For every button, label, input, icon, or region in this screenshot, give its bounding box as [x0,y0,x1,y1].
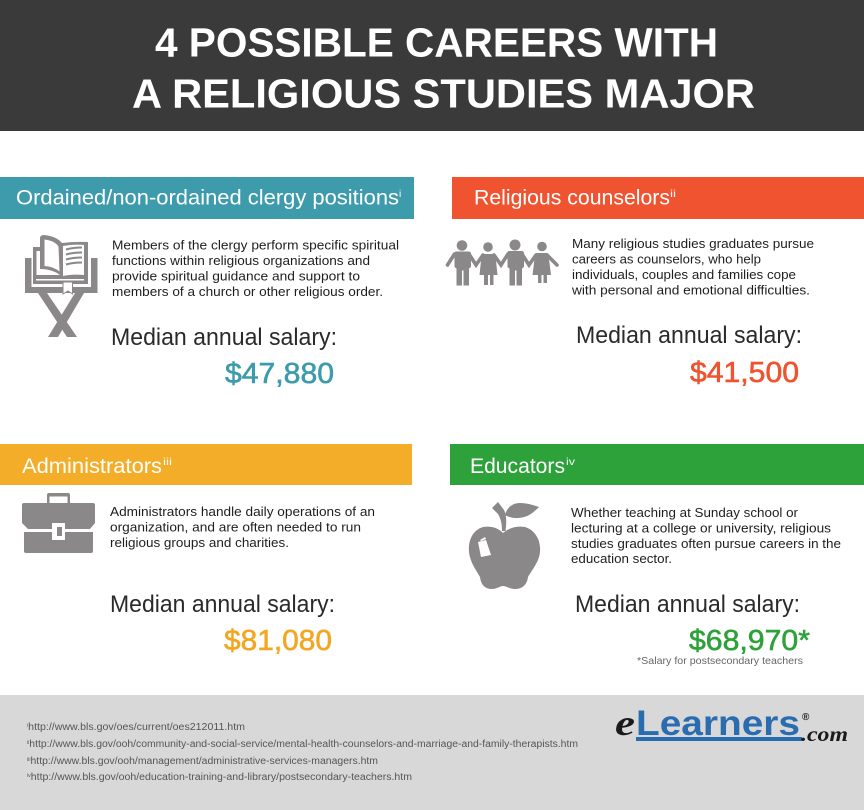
heading: counselors: ii [670,189,676,200]
description: administrators [110,504,375,550]
heading: educators: iv [566,457,575,468]
salary: counselors: Median annual salary: [576,322,802,349]
description: counselors [571,236,814,298]
description: educators: Whether teaching at Sunday school or [571,505,799,520]
source links: ii [27,740,29,746]
source links: iv [27,773,31,779]
description: clergy [112,238,399,299]
panel: counselors [448,177,864,389]
panel: administrators [0,444,412,657]
salary: clergy: Median annual salary: [111,324,337,351]
heading: clergy: Ordained/non-ordained clergy positions [16,186,399,210]
salary: administrators: $81,080 [224,625,332,657]
heading: educators: Educators [470,455,565,478]
heading: administrators: iii [163,457,172,468]
footer [0,695,864,810]
description: counselors: Many religious studies graduates pursue [572,236,814,251]
icon: apple [469,502,540,589]
heading: administrators: Administrators [22,455,162,478]
icon: people holding hands [448,240,557,286]
panel: educators [450,444,864,667]
description: counselors: individuals, couples and families cope [572,267,796,282]
description: educators [571,505,841,566]
salary: clergy [111,324,337,390]
source links: http://www.bls.gov/ooh/education-training-and-library/postsecondary-teachers.htm [31,772,412,783]
heading: educators [450,444,864,485]
salary: counselors: $41,500 [690,357,799,389]
description: clergy: members of a church or other religious order. [112,284,383,299]
icon: briefcase [22,493,95,553]
description: clergy: provide spiritual guidance and support to [112,268,360,284]
panel: clergy [0,177,414,390]
source links: http://www.bls.gov/oes/current/oes212011.htm [28,722,245,733]
title banner: A RELIGIOUS STUDIES MAJOR [132,70,755,116]
heading: clergy [0,177,414,219]
description: counselors: careers as counselors, who help [572,252,761,266]
salary: educators [575,591,810,667]
salary: clergy: $47,880 [225,358,334,390]
description: clergy: Members of the clergy perform specific spiritual [112,238,399,252]
title banner [0,0,864,131]
source links [27,722,578,783]
description: administrators: Administrators handle daily operations of an [110,504,375,519]
salary: counselors [576,322,802,389]
description: clergy: functions within religious organizations and [112,253,370,268]
logo: eLearners.com: .com [801,722,848,746]
logo: eLearners.com: e [615,703,635,743]
footnote: salary: *Salary for postsecondary teachers [637,655,803,667]
source links: i [27,723,28,729]
icon: book on stand [25,235,98,337]
heading: counselors [452,177,864,219]
description: administrators: religious groups and charities. [110,535,289,550]
description: counselors: with personal and emotional difficulties. [571,282,810,298]
description: educators: lecturing at a college or university, religious [571,520,832,536]
title banner: 4 POSSIBLE CAREERS WITH [155,20,718,66]
source links: iii [27,757,30,763]
heading: counselors: Religious counselors [474,186,670,210]
description: administrators: organization, and are often needed to run [110,520,361,534]
heading: administrators [0,444,412,485]
logo: eLearners.com: Learners [636,704,800,743]
logo: eLearners.com [615,703,848,746]
description: educators: education sector. [571,551,672,566]
salary: administrators [110,591,335,657]
heading: clergy: i [399,189,401,200]
description: educators: studies graduates often pursue careers in the [571,536,841,551]
salary: educators: Median annual salary: [575,591,800,618]
source links: http://www.bls.gov/ooh/management/administrative-services-managers.htm [30,756,378,767]
salary: educators: $68,970* [689,625,810,657]
logo: eLearners.com: ® [802,712,810,723]
salary: administrators: Median annual salary: [110,591,335,618]
source links: http://www.bls.gov/ooh/community-and-social-service/mental-health-counselors-and-marriage-and-family-therapists.htm [29,739,578,750]
